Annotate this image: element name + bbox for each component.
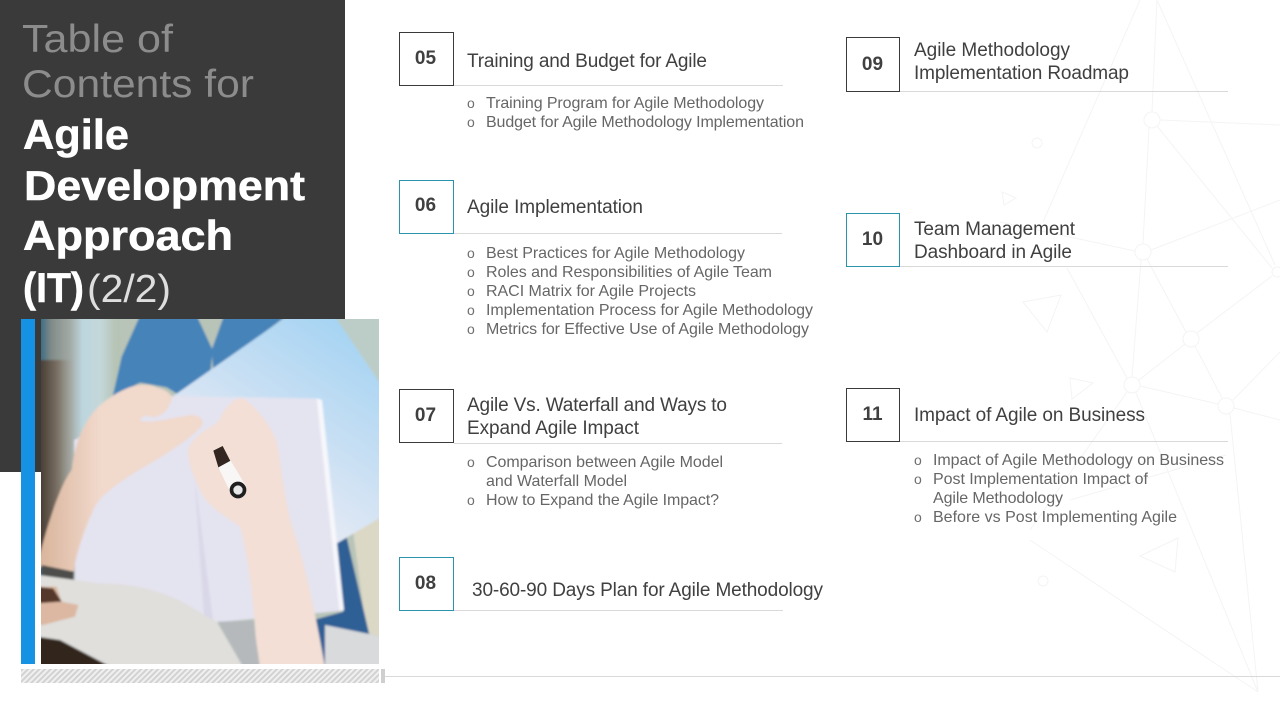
title: Agile (23, 111, 129, 158)
section 05: 05 (415, 48, 436, 69)
title (22, 18, 305, 311)
section 06: o (467, 264, 475, 280)
section 10: Dashboard in Agile (914, 242, 1072, 263)
section 08: 08 (415, 573, 436, 594)
section 07 (400, 390, 782, 509)
section 11: Before vs Post Implementing Agile (933, 509, 1177, 526)
section 11: o (914, 509, 922, 525)
section 11: 11 (862, 404, 883, 425)
section 06: o (467, 245, 475, 261)
section 07: Comparison between Agile Model (486, 454, 723, 471)
section 11: Impact of Agile on Business (914, 405, 1145, 426)
section 07: Expand Agile Impact (467, 418, 640, 439)
section 05 (400, 32, 804, 131)
section 06: Agile Implementation (467, 197, 643, 218)
title: Development (24, 162, 305, 209)
section 11: Agile Methodology (933, 490, 1063, 507)
section 06: Implementation Process for Agile Methodology (486, 302, 813, 319)
section 06: o (467, 321, 475, 337)
section 06: o (467, 283, 475, 299)
title: (2/2) (87, 268, 171, 311)
hatched footer strip (21, 669, 379, 683)
section 05: Budget for Agile Methodology Implementation (486, 114, 804, 131)
section 09: Implementation Roadmap (914, 63, 1129, 84)
section 05: o (467, 95, 475, 111)
title: (IT) (23, 264, 84, 311)
section 07: o (467, 454, 475, 470)
section 05: Training and Budget for Agile (467, 51, 707, 72)
section 06: RACI Matrix for Agile Projects (486, 283, 696, 300)
section 06: Metrics for Effective Use of Agile Methodology (486, 321, 809, 338)
title: Approach (23, 212, 233, 259)
section 09: 09 (862, 54, 883, 75)
background network pattern (1000, 0, 1280, 692)
section 09 (846, 38, 1228, 92)
photo: hands writing in a notebook (41, 319, 379, 664)
section 07: and Waterfall Model (486, 473, 627, 490)
section 08 (400, 558, 824, 611)
title: Table of (22, 18, 173, 61)
section 06: o (467, 302, 475, 318)
section 05: Training Program for Agile Methodology (486, 95, 764, 112)
section 10: Team Management (914, 219, 1076, 240)
section 07: 07 (415, 405, 436, 426)
section 07: Agile Vs. Waterfall and Ways to (467, 395, 727, 416)
section 10: 10 (862, 229, 883, 250)
section 11: o (914, 452, 922, 468)
section 07: How to Expand the Agile Impact? (486, 492, 719, 509)
title: Contents for (22, 63, 254, 106)
section 11: o (914, 471, 922, 487)
section 06 (400, 180, 813, 338)
blue accent bar (21, 319, 35, 664)
section 11 (846, 388, 1228, 526)
section 06: Roles and Responsibilities of Agile Team (486, 264, 772, 281)
section 11: Impact of Agile Methodology on Business (933, 452, 1224, 469)
section 06: Best Practices for Agile Methodology (486, 245, 745, 262)
pen (213, 446, 246, 498)
section 11: Post Implementation Impact of (933, 471, 1149, 488)
section 06: 06 (415, 195, 436, 216)
section 07: o (467, 492, 475, 508)
section 05: o (467, 114, 475, 130)
section 10 (846, 214, 1228, 267)
section 08: 30-60-90 Days Plan for Agile Methodology (472, 580, 824, 601)
left dark title panel (0, 0, 345, 472)
section 09: Agile Methodology (914, 40, 1070, 61)
